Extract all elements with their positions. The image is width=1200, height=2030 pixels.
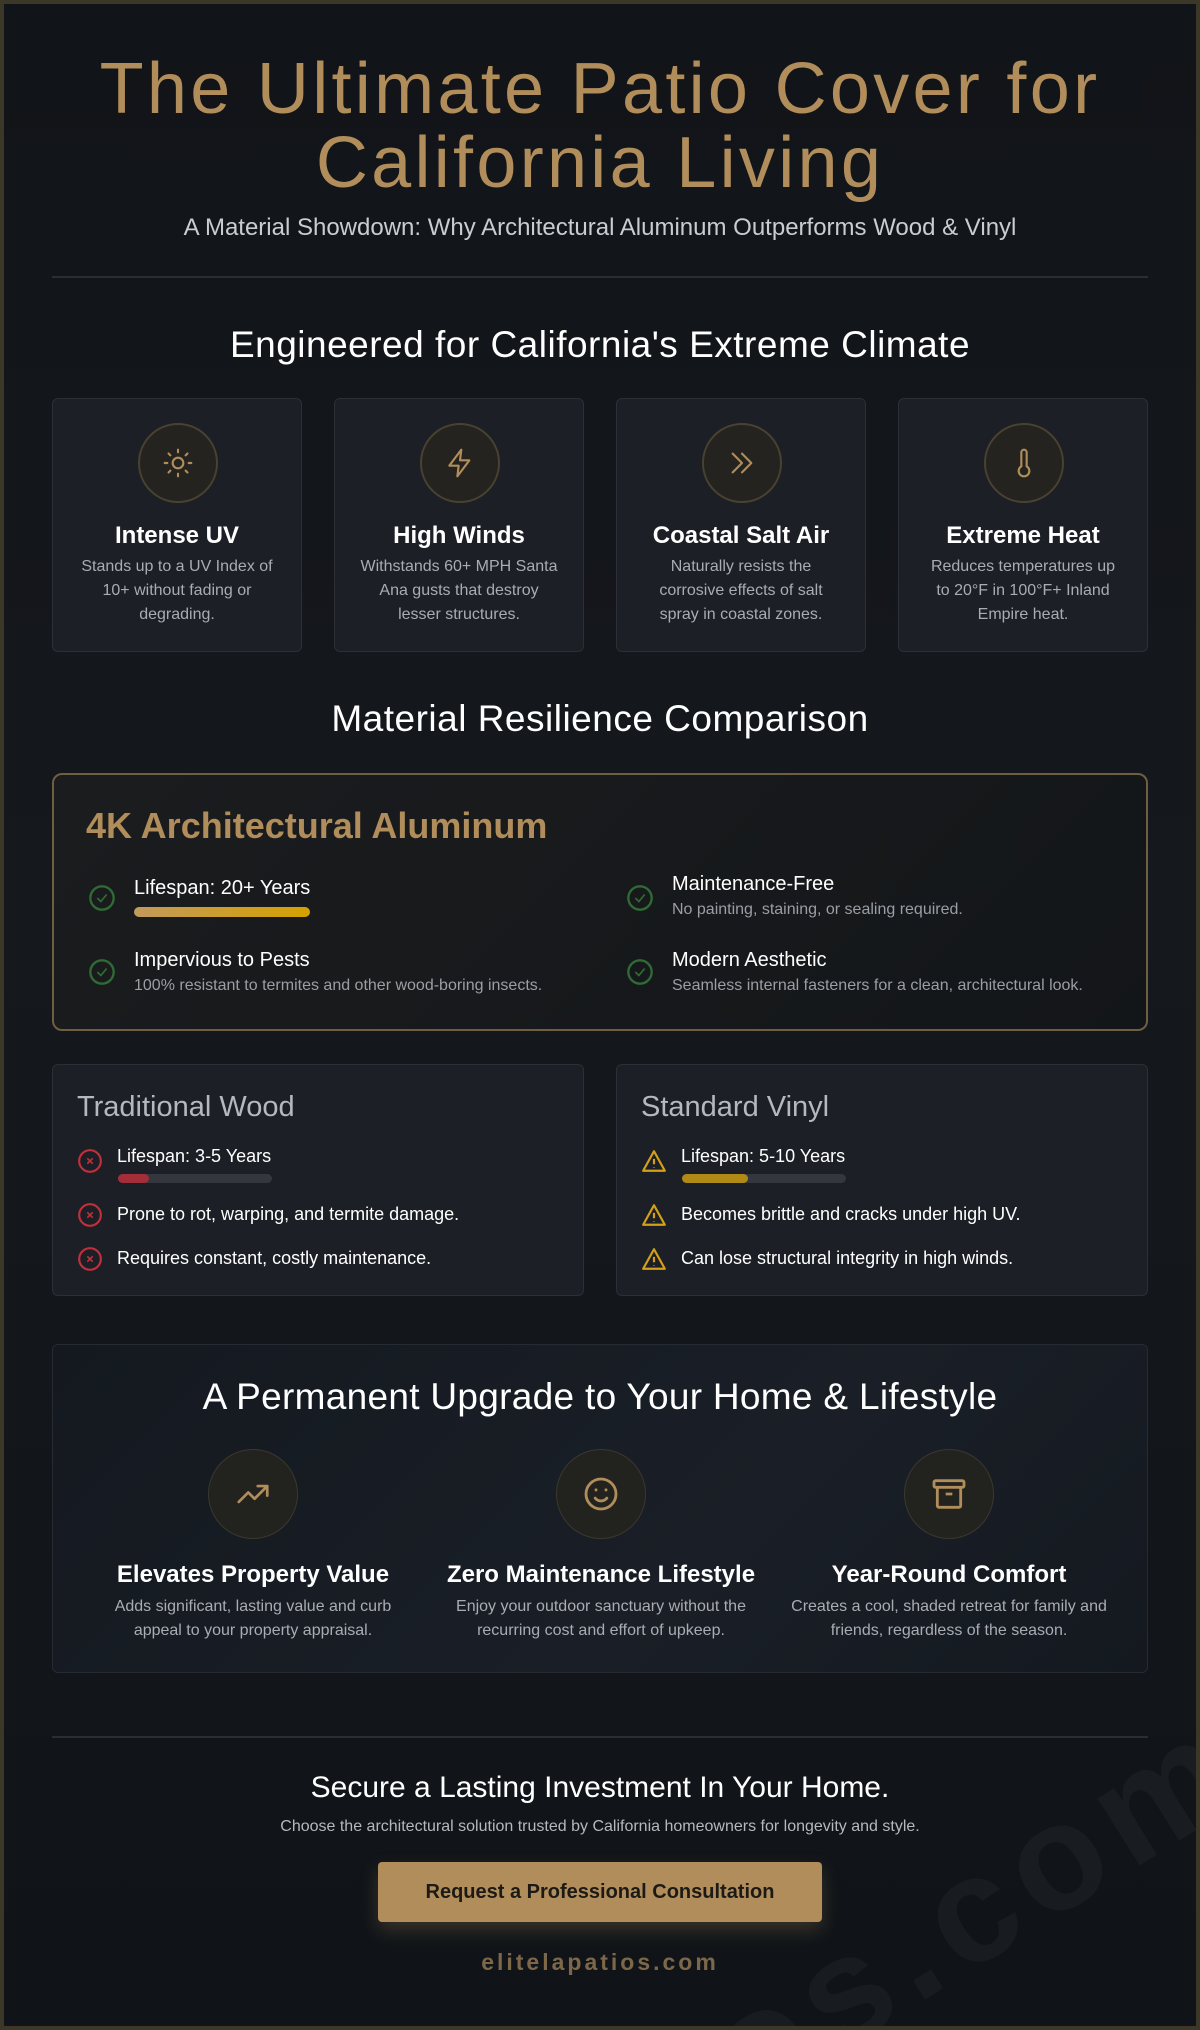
icon: thermometer: [984, 423, 1064, 503]
footer domain: elitelapatios.com: [481, 1949, 719, 1975]
card: Intense UV: Stands up to a UV Index of 10+ without fading or degrading.: [81, 558, 273, 623]
item: aesthetic: [627, 949, 1083, 994]
item: aesthetic: Modern Aesthetic: [672, 949, 827, 971]
benefit: property value: [114, 1449, 391, 1639]
item: vinyl lifespan: Lifespan: 5-10 Years: [681, 1146, 845, 1166]
item: vinyl lifespan: [642, 1146, 846, 1183]
title: [100, 49, 1100, 203]
item: pests: Impervious to Pests: [134, 949, 310, 971]
benefit: zero maintenance: [447, 1449, 755, 1639]
benefit: zero maintenance: Enjoy your outdoor sanctuary without the recurring cost and effort of upkeep.: [456, 1598, 746, 1639]
item: maintenance: Requires constant, costly maintenance.: [117, 1248, 431, 1268]
card: Extreme Heat: Extreme Heat: [946, 522, 1100, 549]
benefit: zero maintenance: Zero Maintenance Lifestyle: [447, 1561, 755, 1588]
benefit: property value: Elevates Property Value: [117, 1561, 389, 1588]
card: Coastal Salt Air: Coastal Salt Air: [653, 522, 829, 549]
item: wood lifespan: Lifespan: 3-5 Years: [117, 1146, 271, 1166]
panel: wood: Traditional Wood: [77, 1091, 295, 1123]
heading: comparison: Material Resilience Comparison: [331, 698, 869, 739]
aluminum title: 4K Architectural Aluminum: [86, 805, 547, 846]
item: rot: Prone to rot, warping, and termite damage.: [117, 1204, 459, 1224]
panel: aluminum: [52, 773, 1148, 1031]
card: High Winds: High Winds: [393, 522, 525, 549]
benefit: comfort: [791, 1449, 1107, 1639]
item: lifespan: Lifespan: 20+ Years: [134, 877, 310, 899]
benefit: comfort: Year-Round Comfort: [832, 1561, 1066, 1588]
card: Extreme Heat: Reduces temperatures up to 20°F in 100°F+ Inland Empire heat.: [931, 558, 1115, 623]
CTA heading: Secure a Lasting Investment In Your Home.: [311, 1771, 889, 1804]
card: Coastal Salt Air: Naturally resists the corrosive effects of salt spray in coastal zones.: [659, 558, 823, 623]
card: Coastal Salt Air: [616, 398, 866, 652]
card: Intense UV: [52, 398, 302, 652]
icon: sun: [138, 423, 218, 503]
item: maintenance: No painting, staining, or sealing required.: [672, 901, 963, 918]
item: maintenance: [627, 873, 963, 918]
upgrade heading: A Permanent Upgrade to Your Home & Lifestyle: [203, 1376, 997, 1417]
CTA text: Choose the architectural solution trusted by California homeowners for longevity and style.: [280, 1818, 920, 1835]
icon: chevrons: [702, 423, 782, 503]
item: pests: [89, 949, 542, 994]
item: pests: 100% resistant to termites and other wood-boring insects.: [134, 977, 542, 994]
CTA button: Request a Professional Consultation: [426, 1881, 774, 1903]
heading: climate: Engineered for California's Extreme Climate: [230, 324, 970, 365]
CTA button: [378, 1862, 822, 1922]
item: brittle: Becomes brittle and cracks under high UV.: [681, 1204, 1021, 1224]
icon: bolt: [420, 423, 500, 503]
panel: upgrade: [52, 1344, 1148, 1673]
card: Intense UV: Intense UV: [115, 522, 239, 549]
item: aesthetic: Seamless internal fasteners for a clean, architectural look.: [672, 977, 1083, 994]
panel: vinyl: [616, 1064, 1148, 1296]
benefit: property value: Adds significant, lasting value and curb appeal to your property appraisal.: [115, 1598, 391, 1639]
benefit: comfort: Creates a cool, shaded retreat for family and friends, regardless of the season.: [791, 1598, 1107, 1639]
item: maintenance: Maintenance-Free: [672, 873, 834, 895]
item: lifespan: [89, 877, 310, 917]
item: integrity: Can lose structural integrity in high winds.: [681, 1248, 1013, 1268]
panel: wood: [52, 1064, 584, 1296]
subtitle: A Material Showdown: Why Architectural Aluminum Outperforms Wood & Vinyl: [184, 214, 1016, 241]
panel: vinyl: Standard Vinyl: [641, 1091, 829, 1123]
item: wood lifespan: [78, 1146, 272, 1183]
card: Extreme Heat: [898, 398, 1148, 652]
card: High Winds: Withstands 60+ MPH Santa Ana gusts that destroy lesser structures.: [360, 558, 557, 623]
title: The Ultimate Patio Cover for: [100, 49, 1100, 129]
title: California Living: [316, 123, 884, 203]
card: High Winds: [334, 398, 584, 652]
